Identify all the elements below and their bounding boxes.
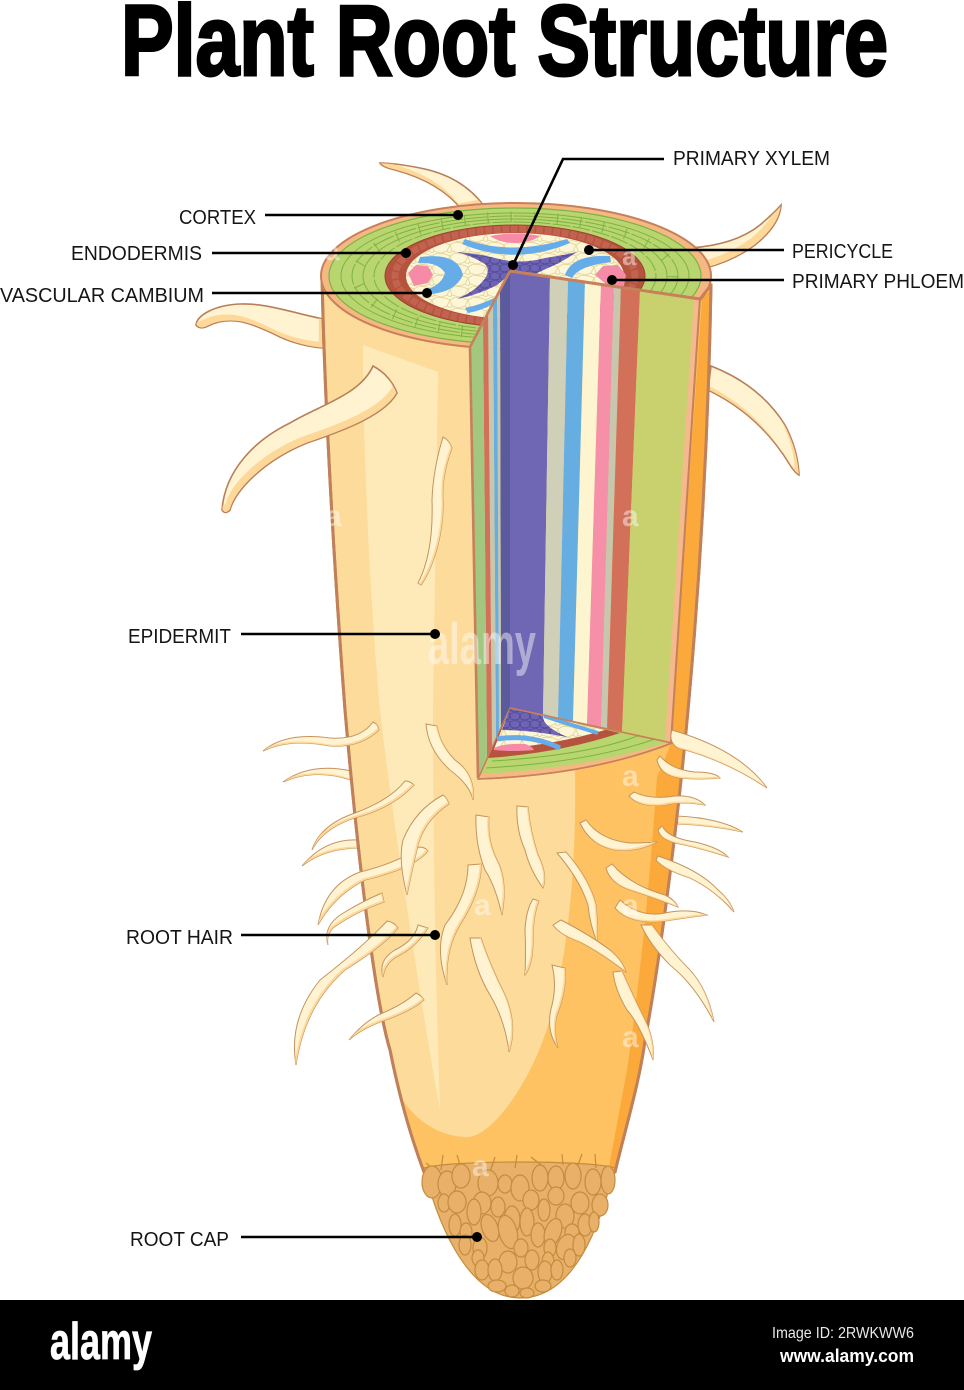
label: pericycle bbox=[584, 241, 893, 263]
label: root hair: ROOT HAIR bbox=[126, 927, 233, 949]
label: root hair bbox=[126, 927, 440, 949]
watermark marks: a bbox=[325, 500, 342, 533]
cap spikes bbox=[426, 1154, 596, 1172]
phloem bbox=[490, 234, 540, 243]
footer bar: alamy bbox=[50, 1313, 152, 1371]
label: primary xylem: PRIMARY XYLEM bbox=[673, 148, 830, 170]
label: root cap: ROOT CAP bbox=[130, 1229, 229, 1251]
watermark marks: a bbox=[622, 500, 639, 533]
cut-away: left inner face bbox=[470, 271, 510, 778]
watermark marks: a bbox=[622, 760, 639, 793]
watermark marks: a bbox=[622, 889, 639, 922]
footer bar bbox=[0, 1300, 964, 1390]
watermark marks bbox=[325, 236, 639, 1183]
label: root cap bbox=[130, 1229, 482, 1251]
watermark marks: a bbox=[472, 1150, 489, 1183]
vascular tissue base bbox=[406, 233, 624, 319]
watermark marks: a bbox=[325, 236, 340, 266]
cortex ring bbox=[329, 208, 701, 344]
root body bbox=[322, 270, 730, 1200]
label: cortex: CORTEX bbox=[179, 207, 256, 229]
footer bar: www.alamy.com bbox=[779, 1346, 914, 1366]
cambium arcs bbox=[462, 239, 570, 255]
xylem star bbox=[457, 252, 577, 299]
footer bar: Image ID: 2RWKWW6 bbox=[772, 1325, 914, 1342]
label: endodermis bbox=[71, 243, 411, 265]
label: cortex bbox=[179, 207, 463, 229]
label: primary phloem bbox=[607, 271, 964, 293]
body shading: dark orange edge bbox=[609, 291, 710, 1168]
label: vascular cambium bbox=[0, 285, 432, 307]
top cross-section bbox=[321, 203, 711, 349]
watermark marks: a bbox=[622, 241, 637, 271]
label: vascular cambium: VASCULAR CAMBIUM bbox=[0, 285, 204, 307]
watermark marks: a bbox=[622, 1021, 639, 1054]
root hairs on the body bbox=[222, 366, 767, 1065]
label: primary xylem bbox=[508, 148, 830, 270]
label: pericycle: PERICYCLE bbox=[792, 241, 893, 263]
cap cells bbox=[422, 1166, 442, 1198]
body shading: orange side bbox=[403, 290, 710, 1168]
label: endodermis: ENDODERMIS bbox=[71, 243, 202, 265]
lateral roots and hairs behind the root body bbox=[196, 163, 799, 866]
body shading: highlight band bbox=[363, 345, 440, 1110]
cut-away: right inner face bbox=[510, 271, 711, 743]
epidermis ring bbox=[321, 203, 711, 349]
cut-away: bottom cross-section floor bbox=[478, 708, 672, 779]
endodermis ring bbox=[385, 225, 645, 327]
watermark marks: a bbox=[474, 889, 491, 922]
watermark marks: alamy bbox=[428, 612, 536, 677]
label: epidermit bbox=[128, 626, 440, 648]
root cap bbox=[422, 1154, 615, 1298]
label: epidermit: EPIDERMIT bbox=[128, 626, 231, 648]
